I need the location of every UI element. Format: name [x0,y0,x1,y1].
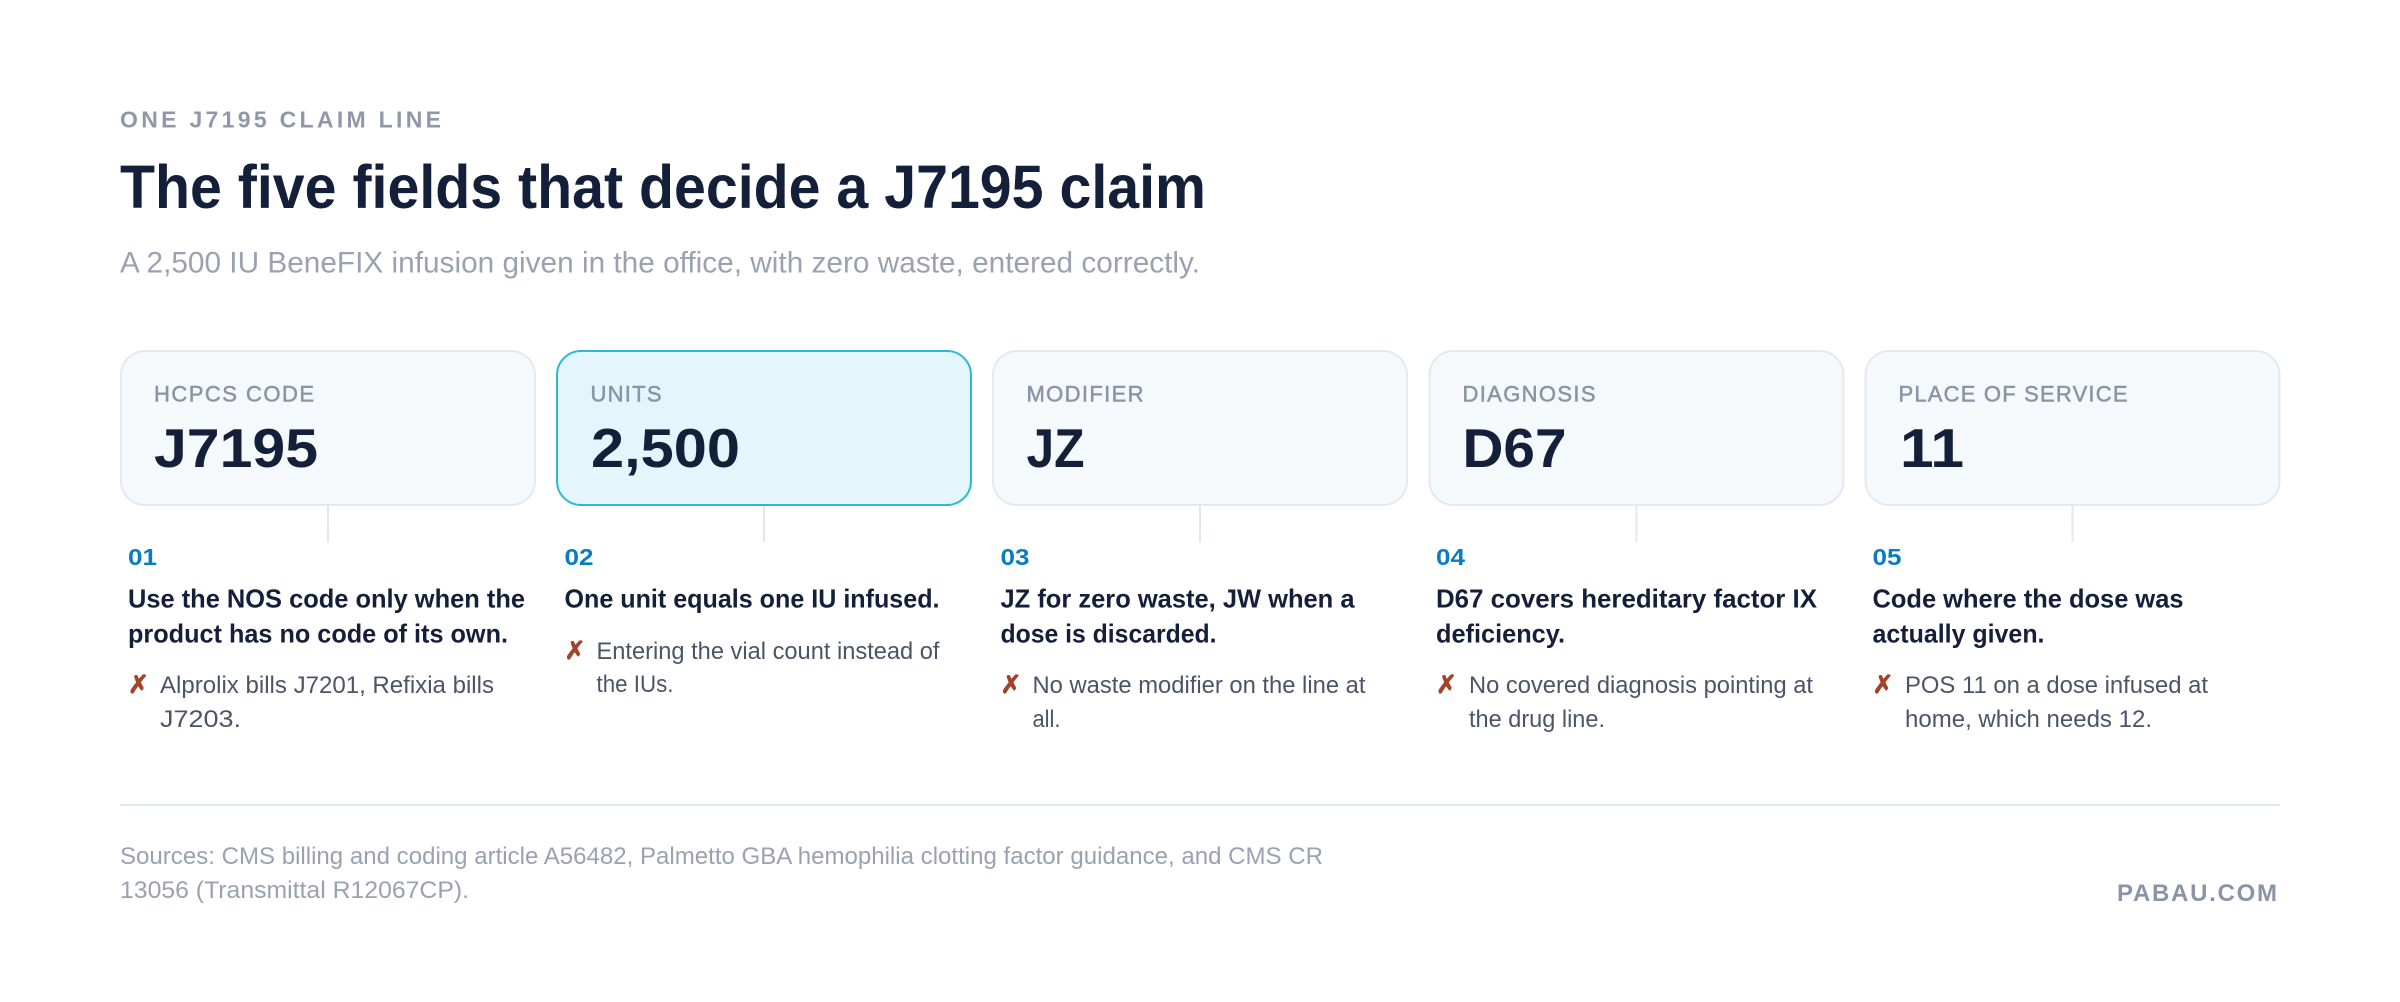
rule heading: Code where the dose was [1872,584,2184,614]
rule heading: actually given. [1872,618,2044,648]
common error: the IUs. [596,671,674,698]
field card [557,351,971,505]
connector [1199,506,1201,542]
rule heading: One unit equals one IU infused. [564,584,940,614]
sources note: 13056 (Transmittal R12067CP). [120,877,469,904]
step number: 04 [1436,544,1465,570]
common error: POS 11 on a dose infused at [1905,672,2208,699]
common error: the drug line. [1469,706,1605,733]
brand mark: PABAU.COM [2117,880,2277,907]
icon: cross mark: ✗ [1000,670,1021,699]
common error: Entering the vial count instead of [596,638,940,665]
connector [2072,506,2074,542]
field value: 2,500 [591,417,740,479]
panel: diagnosis field [1430,351,1844,733]
step number: 02 [564,544,594,570]
icon: cross mark: ✗ [564,636,585,665]
step number: 05 [1872,544,1902,570]
icon: cross mark: ✗ [1436,670,1457,699]
connector [763,506,765,542]
common error: home, which needs 12. [1905,706,2152,733]
field value: 11 [1900,417,1964,479]
field label: MODIFIER [1026,382,1144,406]
field card [993,351,1407,505]
field value: J7195 [154,417,318,479]
title: The five fields that decide a J7195 claim [120,153,1206,221]
common error: J7203. [160,706,241,733]
field label: DIAGNOSIS [1462,382,1596,406]
field label: PLACE OF SERVICE [1898,382,2128,406]
panel: units field (highlighted) [557,351,971,698]
connector [1636,506,1638,542]
field value: JZ [1026,417,1084,479]
icon: cross mark: ✗ [1872,670,1893,699]
icon: cross mark: ✗ [128,670,149,699]
common error: No waste modifier on the line at [1032,672,1366,699]
subtitle: A 2,500 IU BeneFIX infusion given in the office, with zero waste, entered correctly. [120,246,1200,280]
field label: HCPCS CODE [154,382,314,406]
sources note: Sources: CMS billing and coding article A56482, Palmetto GBA hemophilia clotting factor guidance, and CMS CR [120,843,1323,870]
rule heading: deficiency. [1436,618,1565,648]
field card [1430,351,1844,505]
rule heading: dose is discarded. [1000,618,1216,648]
field label: UNITS [590,382,662,406]
step number: 03 [1000,544,1030,570]
field card [121,351,535,505]
common error: Alprolix bills J7201, Refixia bills [160,672,494,699]
field card [1866,351,2280,505]
common error: No covered diagnosis pointing at [1469,672,1813,699]
panel: place of service field [1866,351,2280,733]
panel: HCPCS code field [121,351,535,733]
panel: modifier field [993,351,1407,733]
rule heading: product has no code of its own. [128,618,508,648]
eyebrow: ONE J7195 CLAIM LINE [120,106,441,132]
rule heading: JZ for zero waste, JW when a [1000,584,1355,614]
field value: D67 [1462,417,1566,479]
step number: 01 [128,544,157,570]
common error: all. [1032,706,1060,733]
connector [327,506,329,542]
rule heading: D67 covers hereditary factor IX [1436,584,1818,614]
rule heading: Use the NOS code only when the [128,584,525,614]
